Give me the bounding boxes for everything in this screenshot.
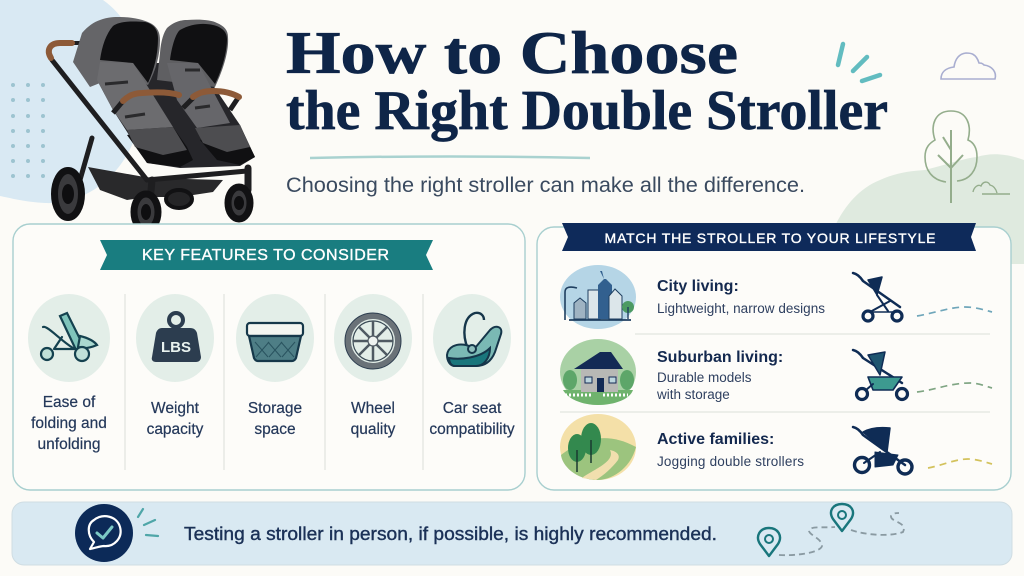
handle: [49, 43, 72, 58]
feature: storage: Storage: [248, 400, 302, 417]
feature: folding: unfolding: [38, 436, 100, 453]
icon: check speech bubble: [75, 504, 133, 562]
frame: [52, 43, 248, 202]
icon: house: [560, 339, 636, 405]
back wheel: [166, 190, 192, 208]
tip text: Testing a stroller in person, if possible, is highly recommended.: [184, 523, 717, 544]
icon rays: [138, 509, 158, 536]
feature: weight: Weight: [151, 400, 200, 417]
row: suburban living: Durable models: [657, 370, 752, 385]
panel: testing tip: [12, 502, 1012, 565]
heading ribbon: lifestyle: [562, 223, 976, 251]
heading ribbon: key features: [100, 240, 433, 270]
row dividers: [560, 334, 990, 412]
row: city living: Lightweight, narrow designs: [657, 301, 825, 316]
title: How to Choose: [286, 20, 738, 86]
hero image: double stroller: [49, 17, 255, 230]
left tray: [127, 127, 193, 167]
row: city living: City living:: [657, 278, 739, 295]
heading ribbon: key features: KEY FEATURES TO CONSIDER: [142, 247, 390, 264]
row: suburban living: Suburban living:: [657, 349, 783, 366]
row: active families: Active families:: [657, 431, 774, 448]
icon: jogging stroller: [853, 427, 912, 474]
icon: basket: [247, 323, 303, 361]
route with pins: [758, 504, 904, 556]
subtitle: Choosing the right stroller can make all the difference.: [286, 173, 805, 197]
wheels: [54, 170, 250, 230]
icon: city stroller: [853, 273, 902, 321]
row: suburban living: with storage: [656, 387, 730, 402]
bar handles: [113, 101, 123, 113]
feature: storage: [236, 294, 314, 438]
feature: wheel: Wheel: [351, 400, 395, 417]
row: suburban living: [560, 339, 992, 405]
row: active families: [560, 414, 992, 480]
left seat: [97, 62, 173, 130]
dashed trail: [917, 383, 992, 392]
heading ribbon: lifestyle: MATCH THE STROLLER TO YOUR LIFESTYLE: [604, 230, 936, 246]
feature: weight: capacity: [147, 421, 204, 438]
decorative green hill: [835, 154, 1024, 264]
dashed trail: [928, 459, 992, 468]
feature: folding: folding and: [31, 415, 107, 432]
basket: [88, 167, 223, 200]
feature: wheel: [334, 294, 412, 438]
title: the Right Double Stroller: [286, 80, 888, 142]
feature: storage: space: [254, 421, 296, 438]
icon: small cloud: [973, 182, 1010, 194]
panel: lifestyle: [537, 223, 1011, 490]
right canopy: [157, 20, 228, 87]
right tray: [200, 125, 255, 165]
icon: suburban stroller: [853, 350, 908, 400]
icon: weight: [152, 313, 201, 362]
feature: car seat: [429, 294, 515, 438]
title rays: [838, 44, 880, 81]
row: active families: Jogging double strollers: [657, 454, 804, 469]
feature: folding: Ease of: [43, 394, 96, 411]
panel: key features: [13, 224, 525, 490]
icon: weight: LBS: [161, 339, 191, 356]
icon: park: [560, 414, 636, 480]
feature: car seat: Car seat: [443, 400, 502, 417]
backing: [97, 63, 255, 168]
title: [286, 20, 888, 142]
row: city living: [560, 265, 992, 329]
icon: cloud: [941, 53, 995, 79]
icon: car seat: [447, 313, 501, 366]
left canopy: [73, 17, 160, 87]
feature: weight: [136, 294, 214, 438]
dot grid: [11, 83, 45, 178]
dividers: [125, 294, 423, 470]
icon: wheel: [345, 313, 401, 369]
feature: car seat: compatibility: [429, 421, 515, 438]
feature: folding: [28, 294, 110, 453]
icon: tree: [925, 111, 977, 203]
icon: folded stroller: [41, 313, 97, 361]
decorative blue blob: [0, 0, 143, 203]
icon: city: [560, 265, 636, 329]
subtitle underline: [310, 156, 590, 158]
right seat: [167, 63, 230, 128]
dashed trail: [917, 307, 992, 316]
feature: wheel: quality: [351, 421, 396, 438]
